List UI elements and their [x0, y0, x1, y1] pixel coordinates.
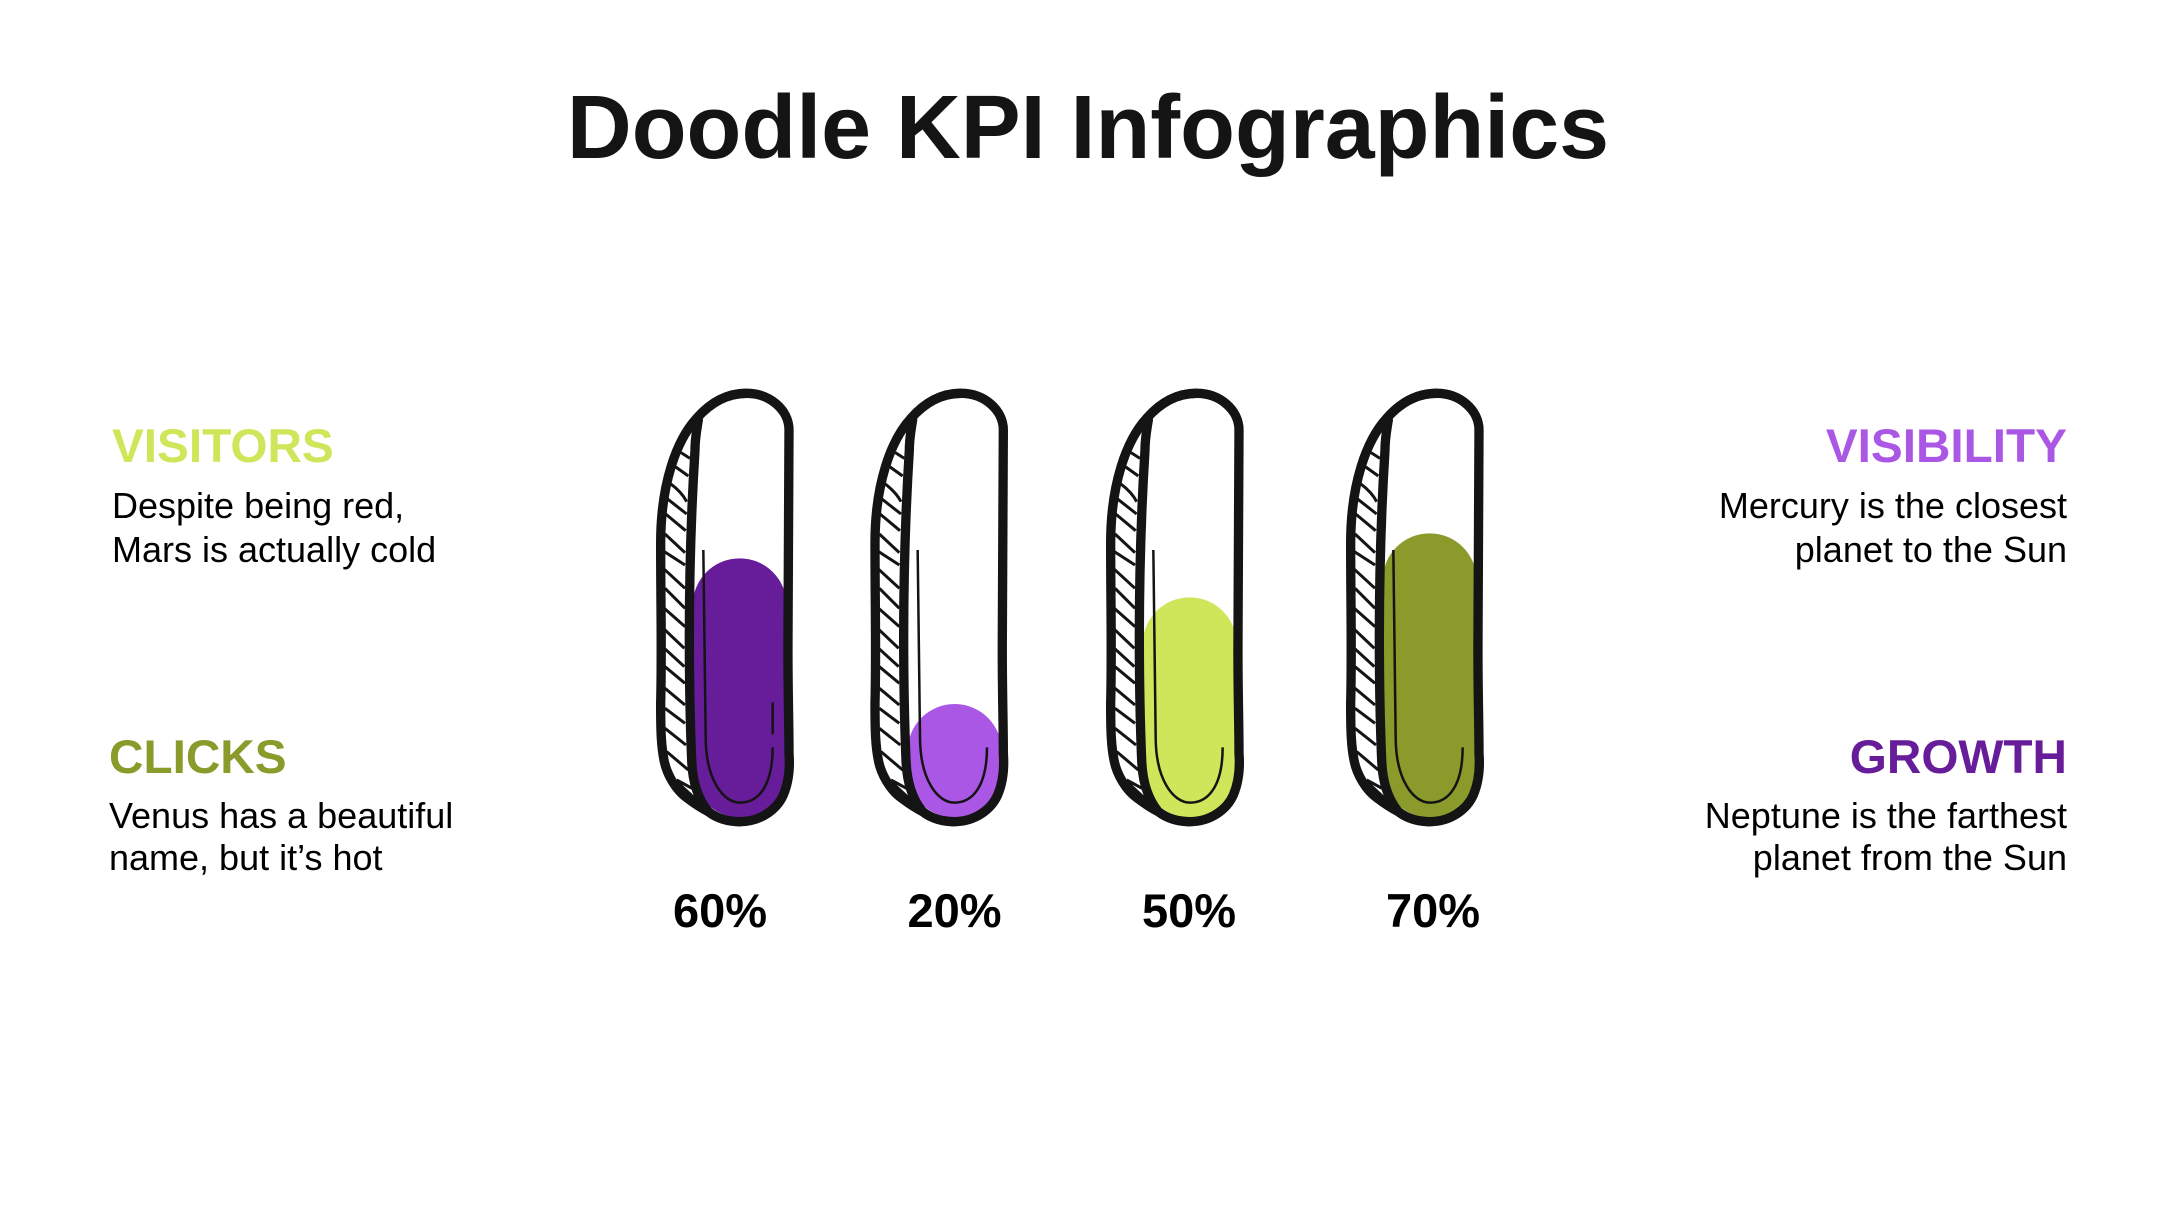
text block: clicks [109, 731, 453, 878]
description: visitors: Despite being red, [112, 485, 404, 526]
tube outline [1111, 393, 1239, 822]
description: clicks: name, but it’s hot [109, 837, 382, 878]
value: 70%: 70% [1386, 884, 1480, 937]
title: Doodle KPI Infographics [567, 78, 1609, 178]
value: 20%: 20% [908, 884, 1002, 937]
heading: clicks: CLICKS [109, 731, 287, 784]
gauge: 20% tube [875, 393, 1006, 822]
highlight dash [769, 702, 776, 734]
tube outline [661, 393, 789, 822]
tube fill 70% [1383, 533, 1482, 817]
tube fill 20% [908, 704, 1006, 817]
description: growth: Neptune is the farthest [1705, 795, 2067, 836]
tube outline [875, 393, 1004, 822]
value: 50%: 50% [1142, 884, 1236, 937]
heading: growth: GROWTH [1850, 731, 2067, 784]
gauge: 70% tube [1351, 393, 1482, 822]
heading: visibility: VISIBILITY [1826, 420, 2067, 473]
tube outline [1351, 393, 1479, 822]
description: visibility: Mercury is the closest [1719, 485, 2067, 526]
text block: growth [1705, 731, 2067, 878]
value: 60%: 60% [673, 884, 767, 937]
tube fill 60% [693, 558, 792, 817]
description: visibility: planet to the Sun [1795, 529, 2067, 570]
gauge: 60% tube [661, 393, 792, 822]
heading: visitors: VISITORS [112, 420, 334, 473]
text block: visitors [112, 420, 436, 570]
description: visitors: Mars is actually cold [112, 529, 436, 570]
description: growth: planet from the Sun [1753, 837, 2067, 878]
text block: visibility [1719, 420, 2067, 570]
gauge: 50% tube [1111, 393, 1242, 822]
tube fill 50% [1143, 597, 1242, 817]
description: clicks: Venus has a beautiful [109, 795, 453, 836]
